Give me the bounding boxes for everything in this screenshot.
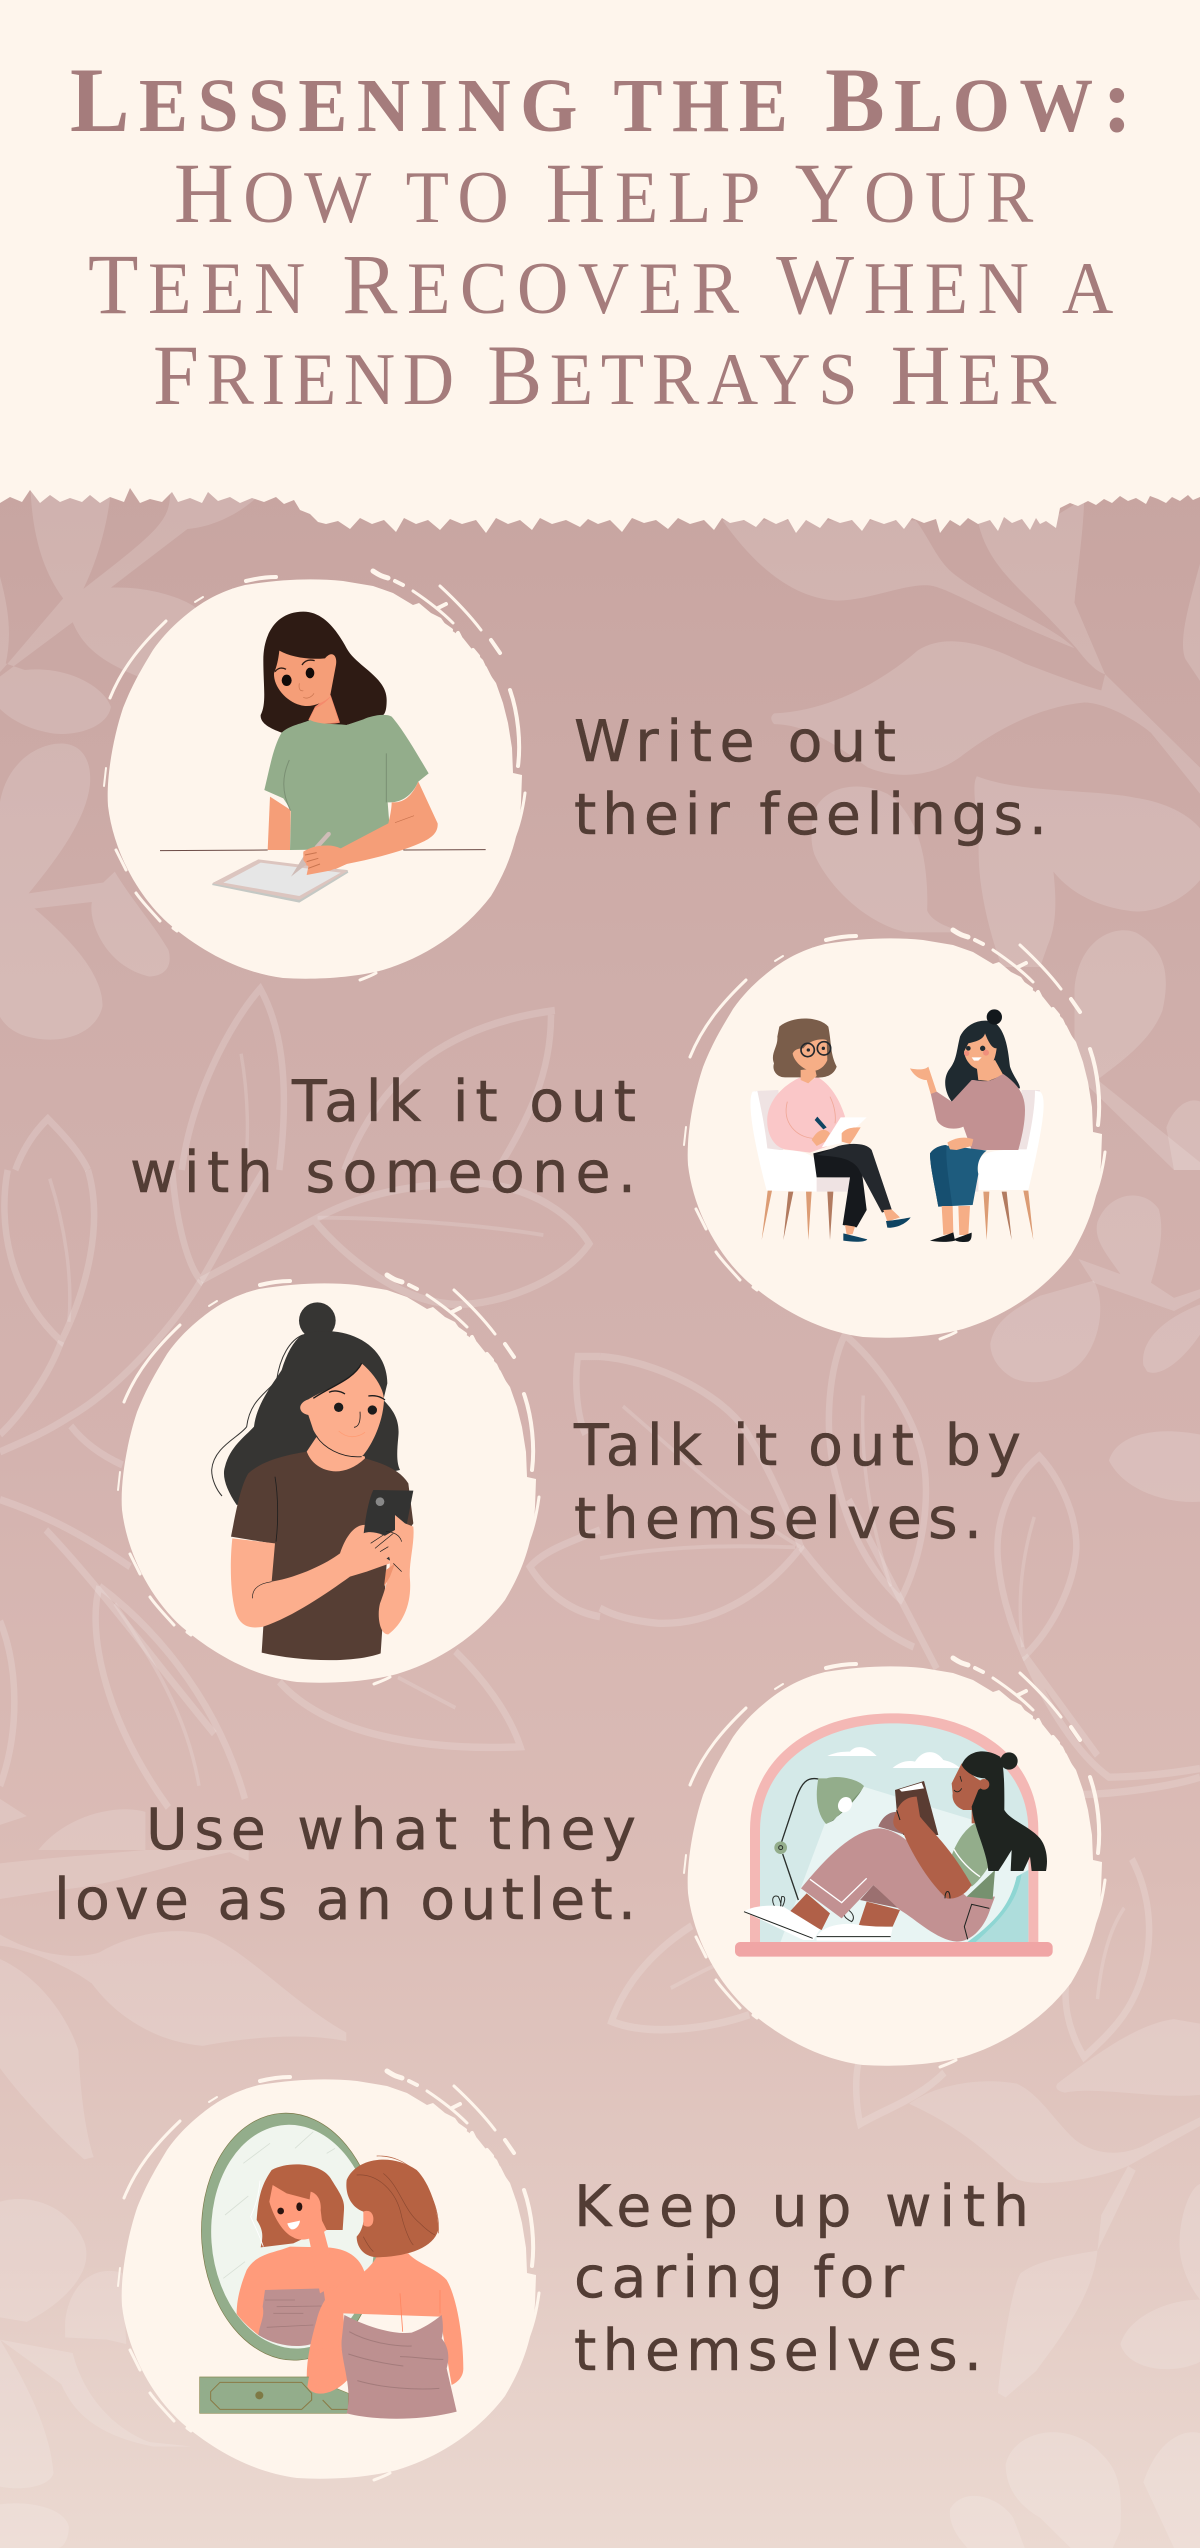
illustration: woman writing on tablet bbox=[160, 612, 486, 903]
step 3 text bbox=[573, 1413, 1021, 1552]
step 2 text: with someone. bbox=[130, 1140, 636, 1206]
step 4 text: Use what they bbox=[146, 1797, 636, 1863]
step 5 text: Keep up with bbox=[574, 2174, 1029, 2240]
step 3 text: themselves. bbox=[574, 1486, 982, 1552]
step 2 text: Talk it out bbox=[291, 1069, 636, 1135]
step 5 text: caring for bbox=[574, 2245, 905, 2311]
step 4 text: love as an outlet. bbox=[54, 1867, 636, 1933]
step 3 circle: woman with phone bbox=[118, 1275, 539, 1684]
illustration: woman using phone bbox=[212, 1302, 414, 1660]
step 1 text: their feelings. bbox=[574, 782, 1047, 848]
illustration: girl reading on window sill bbox=[735, 1713, 1053, 1957]
header panel torn edge bbox=[0, 0, 1200, 533]
step 2 circle: two women talking bbox=[684, 930, 1105, 1339]
title line 1: LESSENING THE BLOW: bbox=[70, 49, 1132, 151]
step 4 circle: girl reading in window bbox=[684, 1658, 1105, 2067]
step 5 circle: woman at mirror bbox=[118, 2071, 539, 2480]
step 1 text: Write out bbox=[574, 709, 896, 775]
step 3 text: Talk it out by bbox=[573, 1413, 1021, 1479]
step 1 circle: woman writing bbox=[104, 571, 525, 980]
title line 2: HOW TO HELP YOUR bbox=[174, 147, 1034, 241]
title line 3: TEEN RECOVER WHEN A bbox=[88, 238, 1113, 332]
step 2 text bbox=[130, 1069, 636, 1206]
step 5 text: themselves. bbox=[574, 2318, 982, 2384]
step 4 text bbox=[54, 1797, 636, 1933]
step 1 text bbox=[574, 709, 1047, 848]
step 5 text bbox=[574, 2174, 1029, 2384]
illustration: therapy session bbox=[750, 1009, 1044, 1242]
title bbox=[70, 49, 1132, 423]
title line 4: FRIEND BETRAYS HER bbox=[153, 329, 1057, 423]
illustration: woman in mirror bbox=[193, 2107, 463, 2419]
